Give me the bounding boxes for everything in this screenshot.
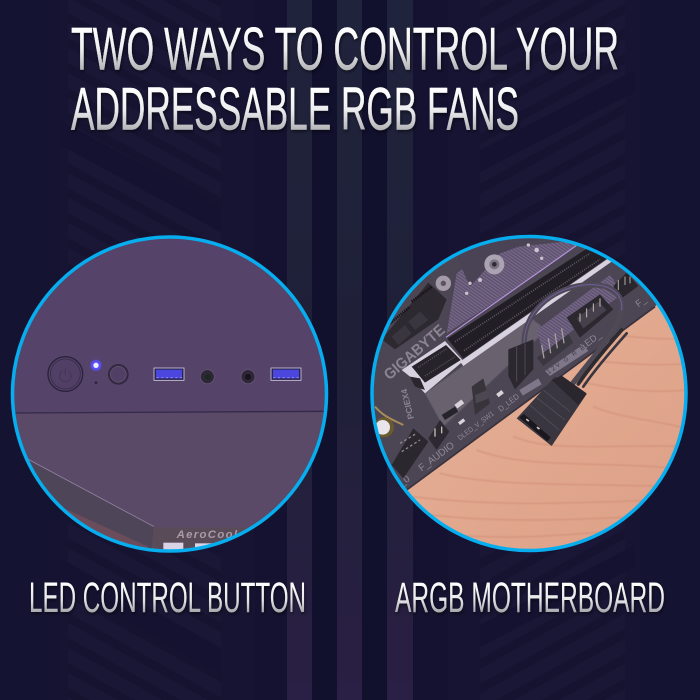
long slot: [447, 247, 608, 359]
upper-left slots: [382, 283, 447, 349]
motherboard: F_AUDIO: [417, 440, 457, 474]
ARGB cable: [524, 285, 627, 387]
icon: screw: [436, 276, 451, 291]
icon: LED control button: [108, 364, 129, 385]
icon: audio jack left: [200, 370, 214, 384]
lower front panel: [28, 459, 248, 550]
ARGB connector plug: [517, 376, 587, 446]
icon: mounting hole: [484, 254, 504, 274]
text: GIGABYTE silk: GIGABYTE: [381, 322, 449, 384]
capacitor: [374, 417, 394, 437]
translucent riser area: [425, 317, 547, 427]
icon: USB port left: [154, 368, 184, 380]
seam line: [13, 411, 327, 413]
PCIe slots: [402, 245, 612, 393]
motherboard: [374, 238, 656, 490]
motherboard: PCIEX4: [399, 388, 416, 420]
board region behind cable: [537, 275, 623, 353]
panel: LED control button photo: [0, 237, 340, 560]
wood surface: [414, 334, 684, 538]
pin headers: 12V G R B: [546, 344, 588, 376]
motherboard: LED_: [579, 329, 604, 352]
motherboard: DLED_V_SW1: [456, 409, 496, 442]
trace area: [447, 240, 580, 333]
connector on header: [508, 339, 533, 389]
panel: ARGB motherboard photo: [360, 230, 700, 560]
motherboard: D_LED: [496, 392, 521, 414]
motherboard: _0: [396, 473, 413, 490]
icon: audio jack right: [241, 370, 255, 384]
motherboard: F_: [634, 294, 649, 309]
title: [71, 16, 619, 142]
white strip under long slot: [460, 258, 612, 366]
lower front panel: AeroCool: [176, 529, 238, 541]
caption: LED control button: LED CONTROL BUTTON: [29, 574, 306, 622]
pin headers: [374, 273, 638, 478]
icon: LED indicator: [91, 360, 101, 384]
icon: USB port right: [271, 368, 301, 380]
icon: power button: [48, 357, 83, 391]
